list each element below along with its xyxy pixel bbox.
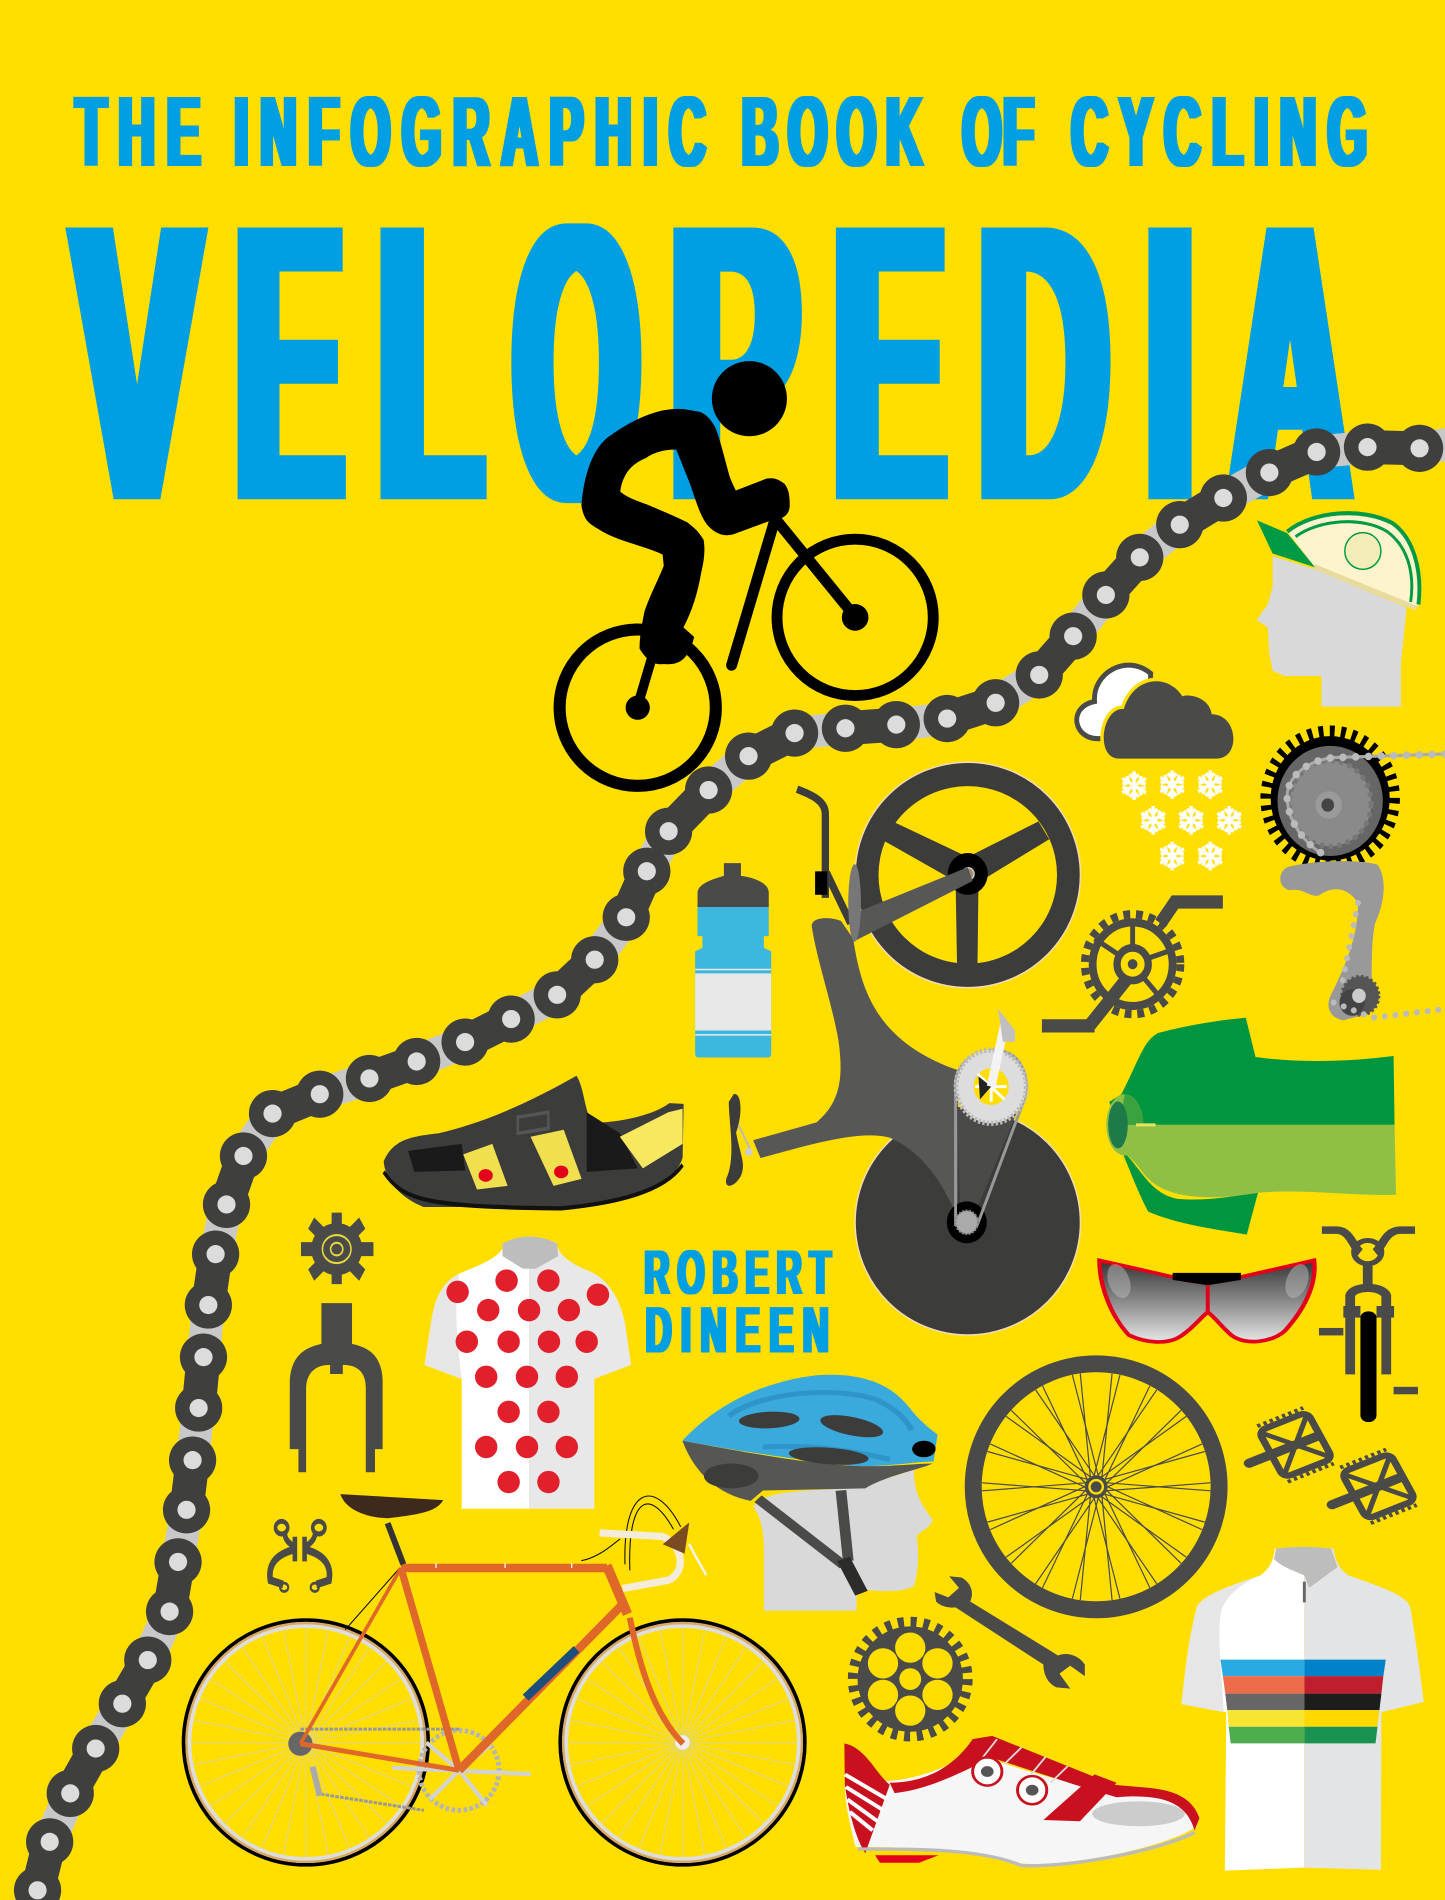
rear disc wheel [855, 1110, 1080, 1335]
title: velopedia [74, 141, 1350, 584]
icon: upper disc wheel with three spokes [855, 762, 1080, 988]
icon: crankset [1042, 902, 1223, 1026]
chainstay wedge [957, 1107, 1019, 1219]
title: the infographic book of cycling [76, 75, 1367, 188]
handlebar [797, 789, 851, 923]
title: velopedia: D [979, 143, 1109, 584]
rear wheel [145, 1581, 467, 1900]
title: velopedia: V [74, 141, 201, 583]
hub [947, 1201, 987, 1243]
icon: water bottle [695, 863, 771, 1058]
left pedal [726, 1094, 743, 1186]
author name: DINEEN [646, 1294, 829, 1367]
icon: blue helmet on head [682, 1375, 938, 1611]
icon: spoked wheel [973, 1364, 1219, 1610]
icon: fork crown [290, 1303, 383, 1472]
crank arm [848, 867, 973, 942]
title: the infographic book of cycling: OF [962, 75, 1034, 188]
icon: snow cloud [1077, 665, 1243, 870]
title: the infographic book of cycling: THE [76, 75, 200, 188]
title: velopedia: A [1231, 143, 1350, 584]
chain loop [955, 1051, 1026, 1224]
drivetrain [419, 1730, 499, 1810]
icon: polka dot jersey [424, 1236, 631, 1509]
icon: time-trial bike frame [726, 789, 1080, 1335]
icon: black cyclist on bike [560, 361, 933, 786]
icon: green jersey [1106, 1018, 1396, 1235]
icon: white and red cycling shoe [844, 1736, 1199, 1866]
title: velopedia: L [379, 143, 482, 584]
front wheel [521, 1581, 844, 1900]
icon: sunglasses [1099, 1260, 1315, 1342]
icon: black cycling shoe with yellow straps [384, 1076, 684, 1208]
title: velopedia: I [1147, 143, 1193, 584]
title: the infographic book of cycling: INFOGRAPHIC [234, 75, 706, 188]
frame tubes [401, 1564, 607, 1571]
icon: brake caliper [270, 1521, 330, 1592]
icon: rear cassette and derailleur [1266, 731, 1445, 1020]
icon: small cog [301, 1213, 373, 1284]
author name [644, 1237, 831, 1367]
icon: orange road bike [145, 1494, 844, 1900]
icon: cycling cap on head [1257, 513, 1420, 707]
icon: sprocket gear [853, 1622, 967, 1736]
handlebar [600, 1533, 680, 1589]
cables [345, 1496, 681, 1630]
title: velopedia: P [670, 141, 799, 583]
frame body [753, 918, 958, 1219]
title: velopedia: E [236, 141, 343, 583]
title: the infographic book of cycling: CYCLING [1071, 75, 1367, 188]
icon: two pedals [1234, 1407, 1418, 1533]
icon: wrench [935, 1576, 1085, 1689]
title: the infographic book of cycling: BOOK [742, 75, 922, 188]
seat post and saddle [388, 1523, 403, 1564]
author name: ROBERT [644, 1237, 831, 1308]
icon: front fork and handlebar [1319, 1230, 1418, 1422]
title: velopedia: O [514, 141, 639, 583]
icon: world champion rainbow jersey [1181, 1547, 1424, 1871]
title: velopedia: E [834, 143, 945, 584]
bicycle chain [29, 443, 1445, 1900]
